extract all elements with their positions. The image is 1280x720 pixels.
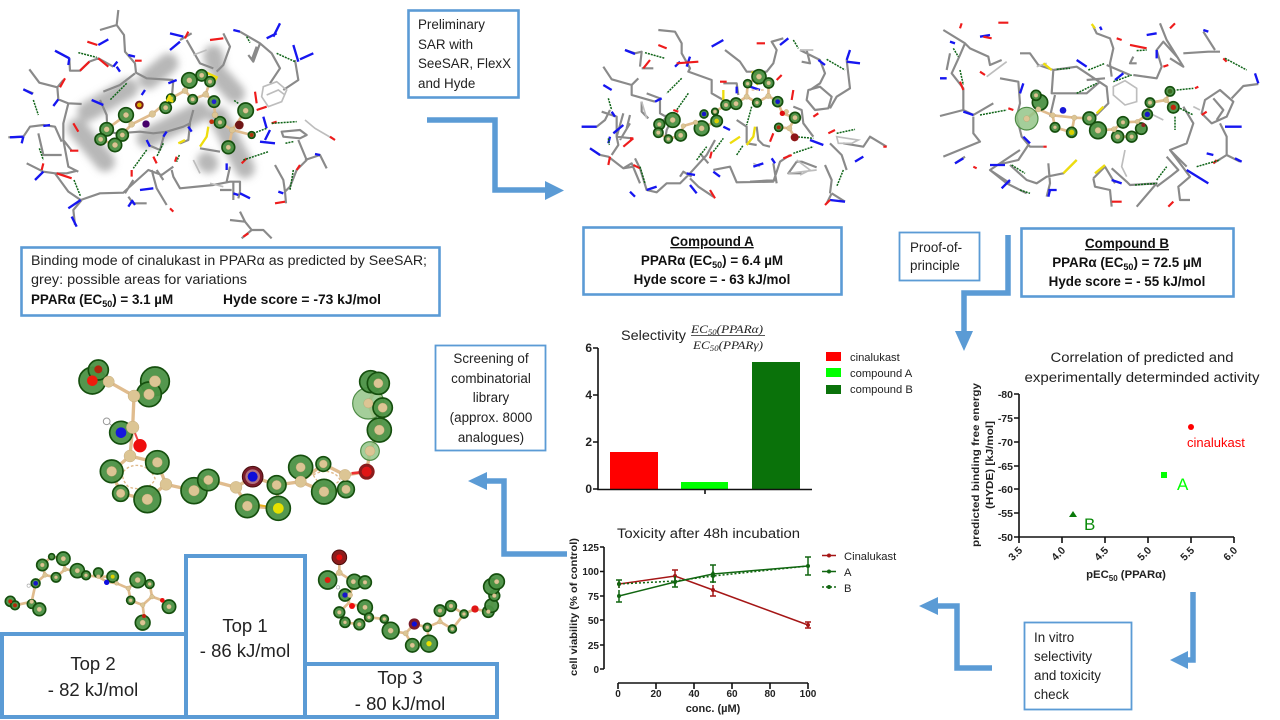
molecule: cinalukast docked in PPARα with variation areas: [8, 10, 335, 238]
text box: screening of combinatorial library: analogues): [458, 430, 524, 445]
scatter chart: predicted vs experimental activity: -65: [998, 461, 1013, 473]
scatter chart: predicted vs experimental activity: -70: [998, 437, 1013, 449]
arrow: correlation to selectivity check: [1170, 592, 1193, 669]
compound B data box: Compound B: [1085, 236, 1169, 251]
compound A data box: Hyde score = - 63 kJ/mol: [634, 272, 790, 287]
text box: preliminary SAR: Preliminary: [418, 17, 485, 32]
line chart: toxicity: 75: [588, 592, 599, 603]
scatter chart: predicted vs experimental activity: 5.5: [1178, 545, 1197, 563]
podium box: top 3: - 80 kJ/mol: [355, 693, 445, 714]
legend: [822, 551, 897, 595]
text box: screening of combinatorial library: combinatorial: [451, 371, 531, 386]
compound B data box: ) = 72.5 µM: [1133, 255, 1202, 270]
compound A data box: 50: [712, 260, 722, 270]
selectivity title with formula: 50: [710, 344, 719, 353]
text box: preliminary SAR: SAR with: [418, 37, 473, 52]
podium box: top 2: - 82 kJ/mol: [48, 679, 138, 700]
scatter chart: predicted vs experimental activity: (HYDE) [kJ/mol]: [984, 421, 996, 509]
podium box: top 3: Top 3: [377, 667, 423, 688]
legend: [826, 352, 913, 396]
bar: compound B: [752, 362, 800, 489]
caption box: cinalukast binding mode: [22, 248, 440, 316]
line chart: toxicity: 0: [615, 689, 621, 700]
text box: in vitro selectivity and toxicity check: and toxicity: [1034, 668, 1101, 683]
text box: in vitro selectivity and toxicity check: check: [1034, 687, 1069, 702]
selectivity title with formula: EC: [693, 338, 708, 352]
scatter chart: predicted vs experimental activity: -75: [998, 413, 1013, 425]
line chart: toxicity: conc. (µM): [686, 703, 741, 715]
arrow: SAR to compound A: [427, 120, 564, 200]
selectivity title with formula: 50: [708, 328, 717, 337]
podium box: top 1: - 86 kJ/mol: [200, 640, 290, 661]
bar chart: selectivity: 2: [585, 435, 592, 449]
caption box: cinalukast binding mode: ) = 3.1 µM: [112, 292, 173, 307]
molecule: compound A in PPARα: [582, 30, 887, 205]
legend: B: [844, 583, 851, 595]
scatter chart: predicted vs experimental activity: 4.5: [1092, 545, 1111, 563]
series: cinalukast: [617, 570, 811, 628]
text box: screening of combinatorial library: (approx. 8000: [450, 410, 532, 425]
point: compound A: A: [1177, 475, 1189, 494]
text box: proof-of-principle: Proof-of-: [910, 240, 962, 255]
podium box: top 2: [2, 634, 186, 717]
legend: cinalukast: [850, 352, 901, 364]
arrow: in vitro check to toxicity chart: [919, 597, 992, 668]
podium box: top 1: [186, 556, 305, 717]
line chart: toxicity: 0: [593, 665, 599, 676]
scatter title: Correlation of predicted and: [1050, 350, 1234, 365]
legend: compound B: [850, 384, 913, 396]
line chart: toxicity: 50: [588, 616, 599, 627]
molecule: top 1 hit, enlarged: [79, 360, 392, 520]
scatter chart: predicted vs experimental activity: -55: [998, 508, 1013, 520]
line chart: toxicity: 125: [582, 543, 599, 554]
line chart: toxicity: 40: [688, 689, 700, 700]
scatter title: [1024, 350, 1260, 385]
ligand with interaction spheres: [654, 70, 800, 143]
text box: screening of combinatorial library: Screening of: [453, 351, 529, 366]
bar chart: selectivity: [585, 322, 913, 496]
scatter title: experimentally determinded activity: [1024, 370, 1260, 385]
bar chart: selectivity: 6: [585, 341, 592, 355]
line chart: toxicity: 100: [800, 689, 817, 700]
compound B data box: Hyde score = - 55 kJ/mol: [1049, 274, 1205, 289]
scatter chart: predicted vs experimental activity: [970, 350, 1260, 583]
point: compound B: [1069, 511, 1095, 534]
scatter chart: predicted vs experimental activity: predicted binding free energy: [970, 383, 982, 547]
molecule: top 2 hit: [5, 552, 176, 630]
line chart: toxicity: 25: [588, 641, 599, 652]
scatter chart: predicted vs experimental activity: -50: [998, 532, 1013, 544]
text box: preliminary SAR: SeeSAR, FlexX: [418, 56, 511, 71]
text box: in vitro selectivity and toxicity check: [1024, 622, 1132, 710]
scatter chart: predicted vs experimental activity: 3.5: [1006, 545, 1025, 563]
text box: in vitro selectivity and toxicity check: In vitro: [1034, 630, 1074, 645]
text box: preliminary SAR: [408, 10, 518, 98]
point: compound B: B: [1084, 515, 1095, 534]
scatter chart: predicted vs experimental activity: pEC: [1086, 569, 1109, 581]
scatter chart: predicted vs experimental activity: -60: [998, 484, 1013, 496]
ligand with interaction spheres: [1015, 87, 1179, 143]
selectivity title with formula: (PPARγ): [719, 338, 763, 352]
caption box: cinalukast binding mode: Binding mode of cinalukast in PPARα as predicted by SeeSAR;: [31, 253, 427, 268]
text box: proof-of-principle: principle: [910, 258, 960, 273]
bar: cinalukast: [610, 452, 658, 489]
podium box: top 3: [305, 664, 497, 717]
ligand with interaction spheres: [95, 70, 255, 154]
legend: Cinalukast: [844, 551, 897, 563]
text box: screening of combinatorial library: [436, 346, 546, 450]
selectivity title with formula: EC: [691, 322, 706, 336]
line chart: toxicity: 60: [726, 689, 738, 700]
point: cinalukast: [1187, 424, 1245, 450]
arrow: compound B to correlation plot: [955, 235, 1008, 351]
legend: compound A: [850, 368, 913, 380]
text box: in vitro selectivity and toxicity check: selectivity: [1034, 649, 1092, 664]
grey variation areas: [77, 55, 245, 168]
podium box: top 1: Top 1: [222, 615, 268, 636]
compound A data box: Compound A: [670, 234, 754, 249]
text box: screening of combinatorial library: library: [473, 390, 510, 405]
line chart: toxicity: 100: [582, 567, 599, 578]
text box: proof-of-principle: [900, 232, 980, 280]
scatter chart: predicted vs experimental activity: 4.0: [1049, 545, 1068, 563]
line chart: toxicity: [568, 526, 897, 715]
scatter chart: predicted vs experimental activity: (PPARα): [1118, 569, 1166, 581]
podium box: top 2: Top 2: [70, 653, 116, 674]
arrow: toxicity check to screening: [468, 472, 567, 554]
scatter chart: predicted vs experimental activity: 50: [1109, 574, 1118, 583]
scatter chart: predicted vs experimental activity: -80: [998, 389, 1013, 401]
caption box: cinalukast binding mode: Hyde score = -73 kJ/mol: [223, 292, 381, 307]
selectivity title with formula: Selectivity: [621, 328, 686, 343]
bar chart: selectivity: 0: [585, 482, 592, 496]
caption box: cinalukast binding mode: grey: possible areas for variations: [31, 272, 247, 287]
line chart: toxicity: 20: [650, 689, 662, 700]
compound A data box: ) = 6.4 µM: [722, 253, 783, 268]
compound B data box: [1022, 228, 1234, 296]
series: A: [616, 557, 811, 602]
compound A data box: [584, 228, 842, 294]
bar chart: selectivity: 4: [585, 388, 592, 402]
line chart: toxicity: Toxicity after 48h incubation: [617, 526, 800, 541]
series: B: [616, 566, 808, 588]
scatter chart: predicted vs experimental activity: 5.0: [1135, 545, 1154, 563]
compound B data box: 50: [1123, 262, 1133, 272]
molecule: top 3 hit: [319, 550, 504, 652]
text box: preliminary SAR: and Hyde: [418, 76, 475, 91]
selectivity title with formula: [621, 322, 765, 353]
caption box: cinalukast binding mode: PPARα (EC: [31, 292, 102, 307]
point: cinalukast: cinalukast: [1187, 435, 1245, 450]
selectivity title with formula: (PPARα): [717, 322, 763, 336]
line chart: toxicity: cell viability (% of control): [568, 538, 580, 676]
caption box: cinalukast binding mode: 50: [102, 299, 112, 309]
compound A data box: PPARα (EC: [641, 253, 712, 268]
compound B data box: PPARα (EC: [1052, 255, 1123, 270]
legend: A: [844, 567, 852, 579]
scatter chart: predicted vs experimental activity: 6.0: [1221, 545, 1240, 563]
line chart: toxicity: 80: [764, 689, 776, 700]
point: compound A: [1161, 472, 1189, 494]
bar: compound A: [681, 482, 728, 489]
molecule: compound B in PPARα: [940, 23, 1258, 207]
